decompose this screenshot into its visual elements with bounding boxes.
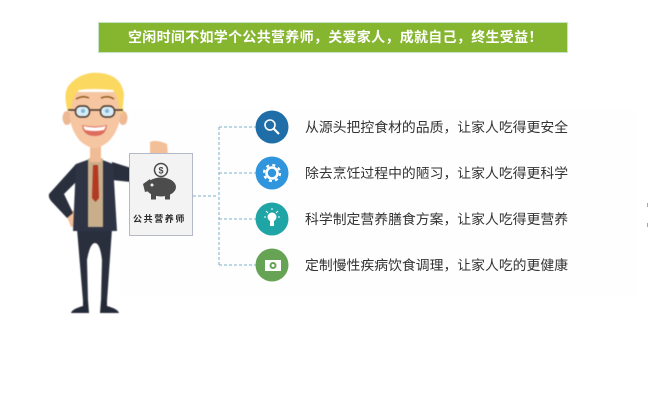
panel: faint background	[120, 110, 636, 295]
right hand	[150, 141, 168, 155]
face	[70, 92, 120, 148]
left arm	[49, 164, 80, 218]
icon: light bulb	[256, 202, 288, 236]
text: item 3: 科学制定营养膳食方案，让家人吃得更营养	[305, 211, 568, 227]
connector lines	[193, 127, 256, 265]
title banner: 空闲时间不如学个公共营养师，关爱家人，成就自己，终生受益！	[128, 29, 543, 45]
eyebrows	[76, 97, 114, 99]
card	[130, 154, 192, 236]
edge marks	[647, 203, 648, 227]
shoes	[71, 300, 89, 313]
left hand	[66, 210, 76, 227]
right arm	[112, 162, 131, 182]
text: item 4: 定制慢性疾病饮食调理，让家人吃的更健康	[305, 257, 568, 273]
icon: gear	[256, 156, 288, 190]
title banner	[99, 23, 567, 52]
shirt	[88, 156, 103, 227]
tie	[92, 165, 99, 202]
legs	[77, 229, 112, 301]
mouth	[82, 125, 107, 136]
illustration: businessman	[49, 73, 168, 313]
jacket	[73, 159, 117, 231]
icon: coin: $	[158, 166, 164, 176]
text: item 2: 除去烹饪过程中的陋习，让家人吃得更科学	[305, 165, 568, 181]
ears	[62, 111, 72, 125]
hair	[65, 73, 124, 116]
icon: camera	[256, 248, 288, 282]
icon: piggy bank	[143, 178, 176, 200]
card label: 公共营养师	[133, 213, 186, 224]
text: item 1: 从源头把控食材的品质，让家人吃得更安全	[305, 119, 568, 135]
neck	[90, 142, 101, 162]
icon: magnifier	[256, 110, 288, 144]
eyes	[81, 109, 85, 113]
glasses	[68, 106, 123, 117]
